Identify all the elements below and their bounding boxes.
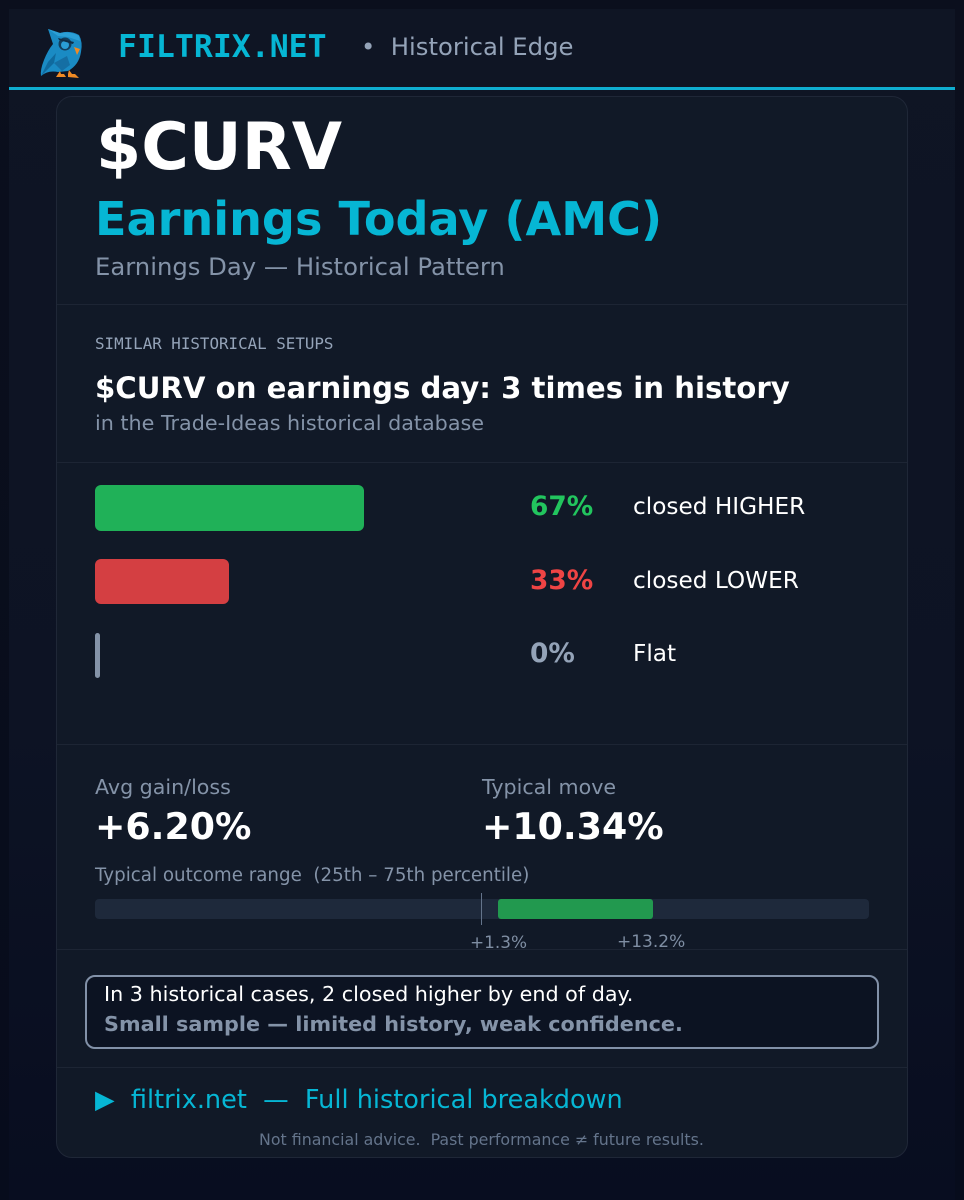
chart: outcome bars [95,485,805,678]
subheading: Earnings Day — Historical Pattern [95,252,505,281]
range low label: +1.3% [470,932,527,952]
stat value: +6.20% [95,805,251,848]
stat: avg gain/loss [95,775,251,848]
range fill [498,899,653,919]
panel: main card [56,96,908,1158]
range track [95,899,869,919]
title: ticker: $CURV [96,110,342,185]
icon: owl logo [40,29,82,78]
label: lower: closed LOWER [633,567,799,594]
label: higher: closed HIGHER [633,493,805,520]
stat label: Avg gain/loss [95,775,231,799]
callout line 2: Small sample — limited history, weak confidence. [104,1012,683,1036]
section label: SIMILAR HISTORICAL SETUPS [95,334,333,353]
bar: higher [95,485,364,531]
value: lower: 33% [530,565,593,596]
bar: lower [95,559,229,604]
callout line 1: In 3 historical cases, 2 closed higher by end of day. [104,982,633,1006]
range high label: +13.2% [617,932,685,952]
heading: earnings today: Earnings Today (AMC) [95,192,662,246]
zero marker [481,893,482,925]
section headline: $CURV on earnings day: 3 times in history [95,371,790,405]
disclaimer: Not financial advice. Past performance ≠ future results. [259,1130,704,1149]
value: flat: 0% [530,638,575,669]
label: flat: Flat [633,640,676,667]
chart: outcome range [95,893,869,952]
brand name: FILTRIX.NET [118,29,327,65]
callout [85,975,879,1049]
call to action: ▶ filtrix.net — Full historical breakdown [95,1085,623,1115]
stat: typical move [482,775,664,848]
header band [40,29,573,78]
stat value: +10.34% [482,805,664,848]
stat label: Typical move [482,775,616,799]
range heading: Typical outcome range (25th – 75th percentile) [95,865,529,886]
section subtext: in the Trade-Ideas historical database [95,411,484,435]
header tagline: • Historical Edge [361,32,573,61]
value: higher: 67% [530,491,593,522]
bar: flat [95,633,100,678]
header rule [9,87,955,90]
